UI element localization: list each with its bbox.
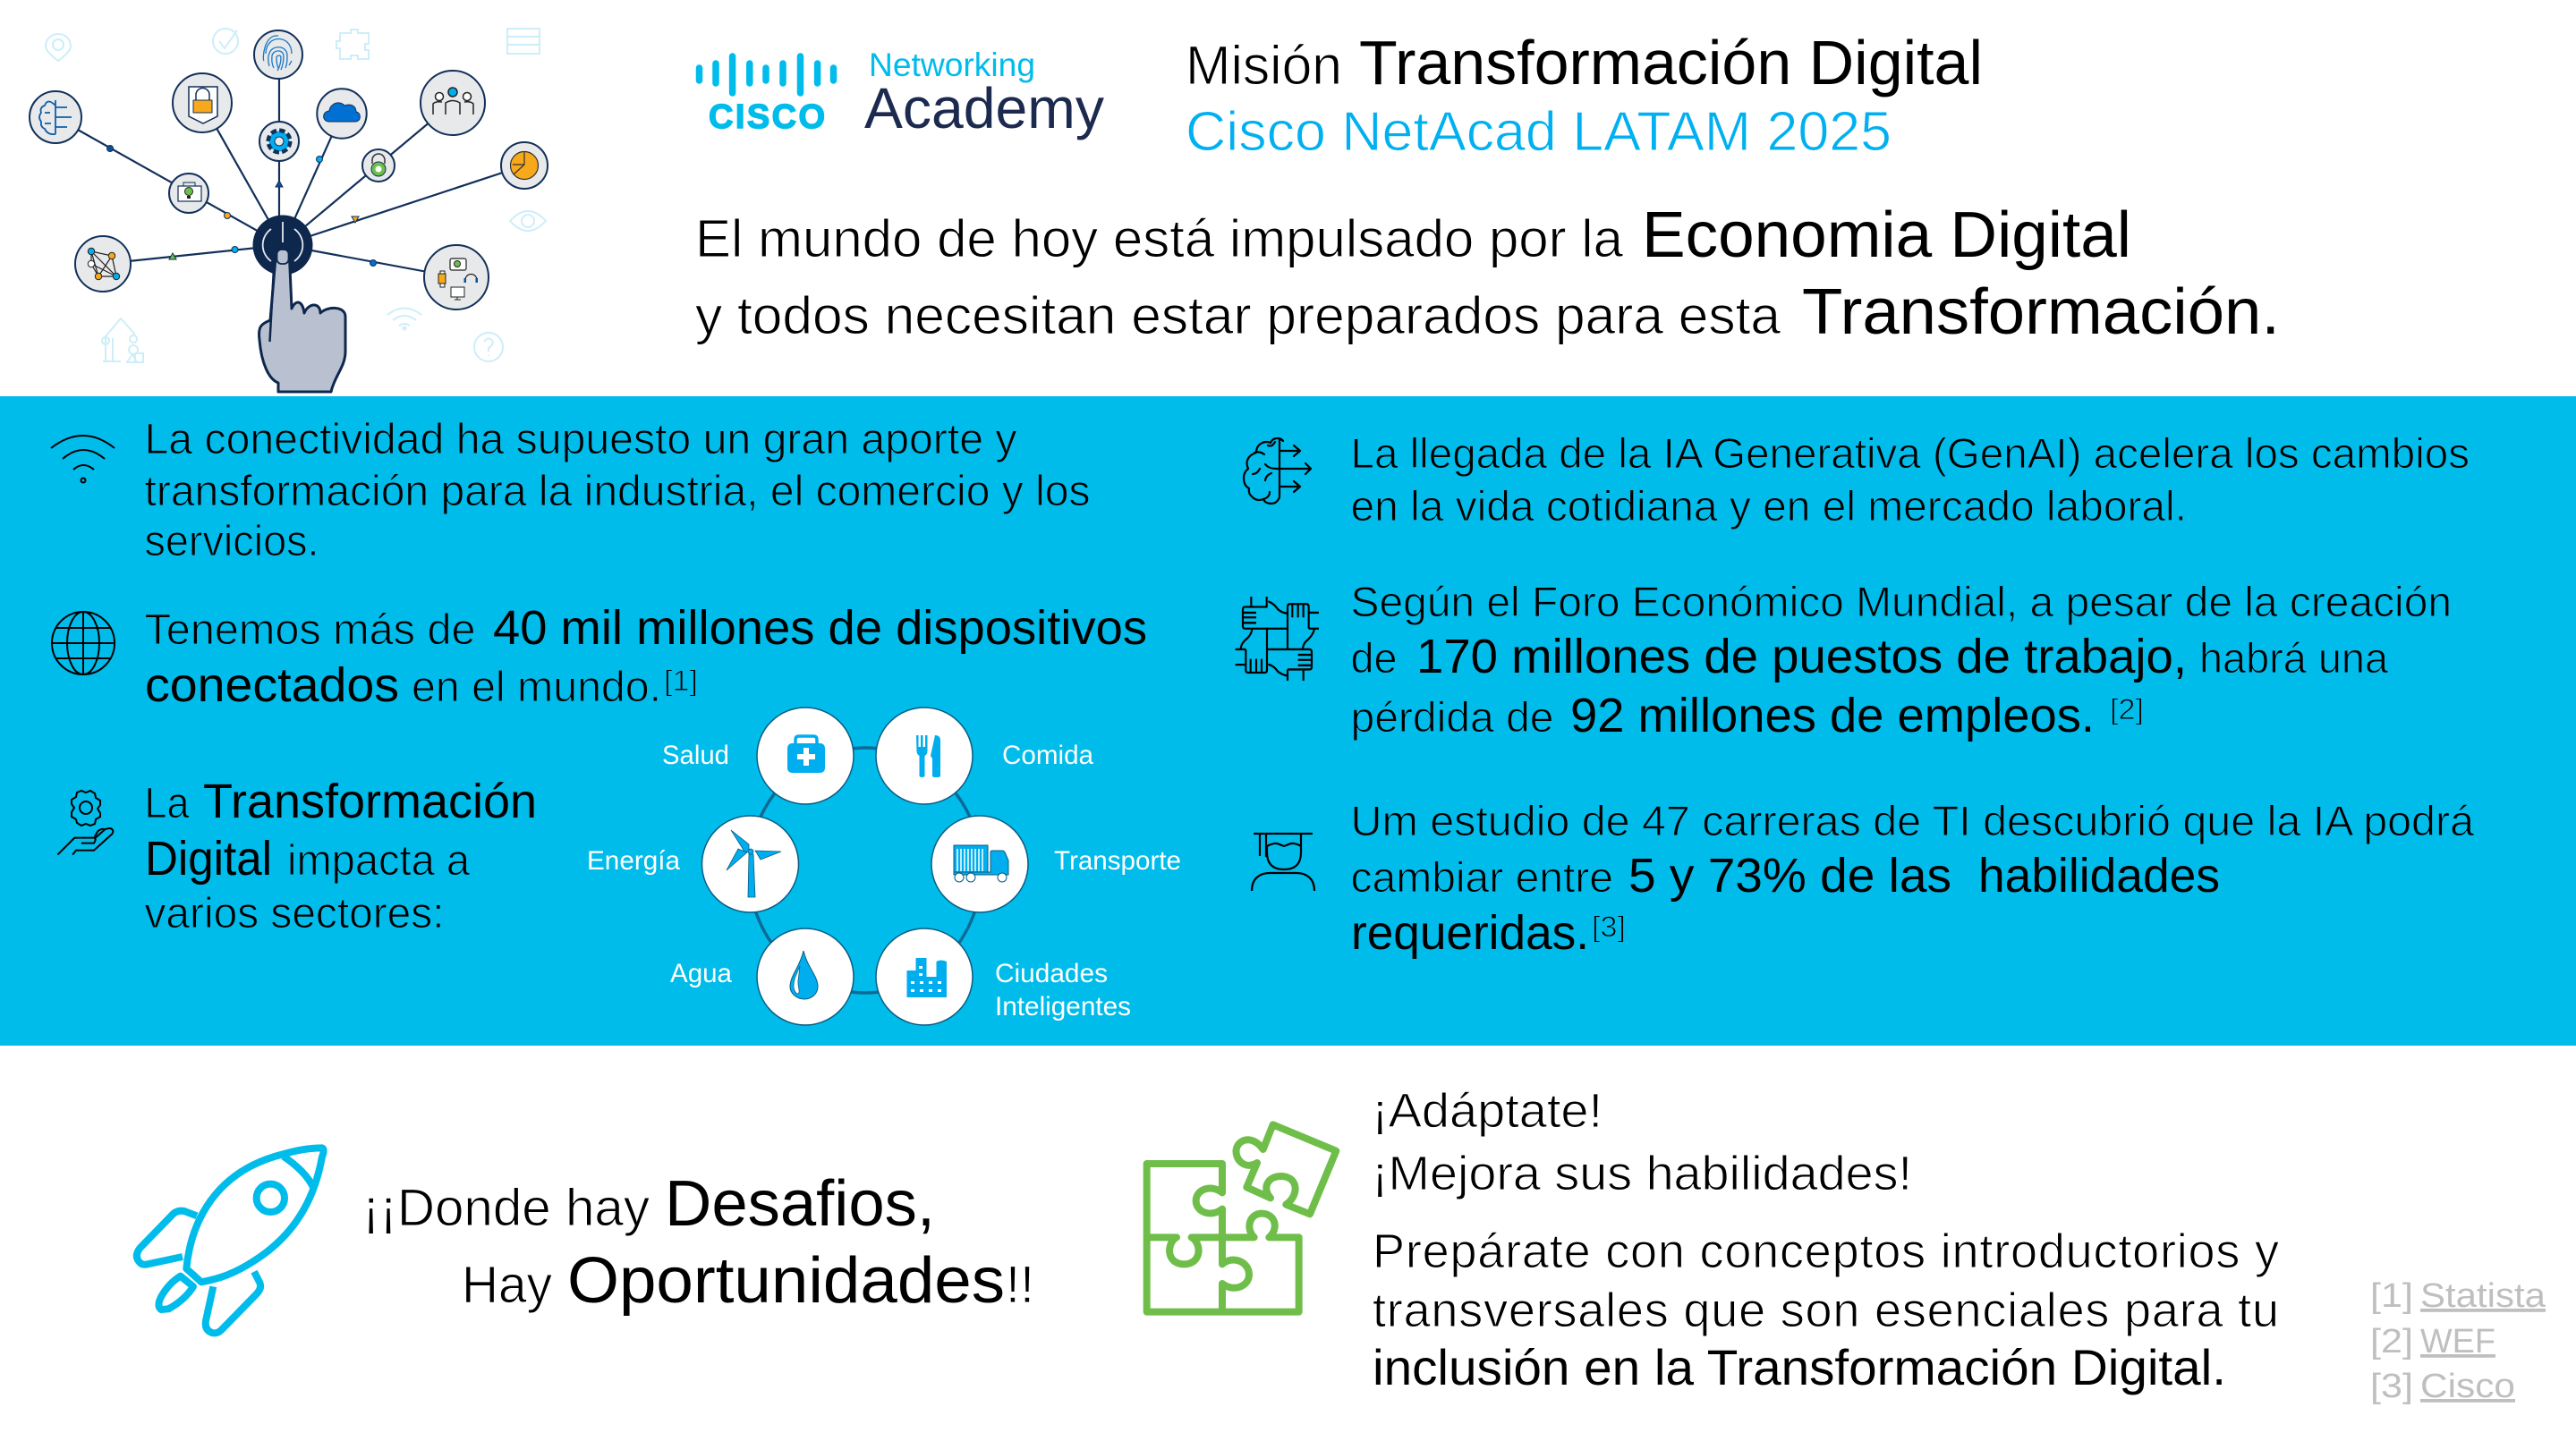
faded background icons	[46, 29, 546, 362]
text: adapt: inclusión en la Transformación Digital.	[1373, 1339, 2226, 1395]
text: devices: Tenemos más de	[145, 606, 476, 654]
connector markers	[107, 145, 376, 267]
chart: sectors wheel	[587, 708, 1181, 1025]
text: challenges: !!	[1006, 1256, 1034, 1314]
icon: truck	[954, 845, 1008, 882]
icon: devices	[438, 259, 478, 300]
text: adapt: Prepárate con conceptos introductorios y	[1373, 1225, 2279, 1278]
text: devices: 40 mil millones de dispositivos	[493, 601, 1147, 655]
text: IT careers study: requeridas.	[1351, 906, 1589, 960]
icon: gear	[268, 131, 290, 152]
icon: graduate	[1252, 834, 1314, 891]
wheel labels: Inteligentes	[995, 992, 1131, 1021]
icon: pie chart	[510, 152, 539, 179]
wheel labels: Energía	[587, 846, 680, 876]
icon: wind turbine	[727, 830, 781, 897]
icon: network	[88, 248, 120, 280]
icon: joined hands	[1236, 597, 1319, 681]
text: generative AI: La llegada de la IA Generativa (GenAI) acelera los cambios	[1351, 429, 2470, 477]
intro statement: y todos necesitan estar preparados para esta	[695, 286, 1781, 345]
icon: rocket	[137, 1148, 324, 1333]
wheel labels: Comida	[1002, 741, 1093, 770]
intro statement: Transformación.	[1802, 276, 2280, 348]
text: World Economic Forum: pérdida de	[1351, 693, 1553, 741]
text: connectivity: La conectividad ha supuesto un gran aporte y	[145, 416, 1016, 463]
icon: medkit	[787, 736, 825, 773]
icon: cloud	[324, 103, 360, 122]
text: World Economic Forum: 92 millones de empleos.	[1570, 689, 2095, 742]
text: sectors intro: La	[145, 780, 190, 827]
icon: globe	[52, 612, 115, 674]
wheel labels	[587, 741, 1181, 1021]
text: World Economic Forum: habrá una	[2199, 634, 2389, 682]
references: Cisco	[2420, 1368, 2515, 1405]
text: devices	[145, 601, 1147, 712]
panel: blue band	[0, 396, 2576, 1046]
references: Statista	[2420, 1277, 2546, 1315]
text: World Economic Forum	[1351, 578, 2452, 742]
text: devices: conectados	[145, 658, 399, 712]
text: connectivity: servicios.	[145, 518, 319, 565]
intro statement: Economia Digital	[1642, 199, 2131, 271]
icon: city	[907, 958, 947, 997]
title: Transformación Digital	[1359, 28, 1983, 97]
logo: Cisco Networking Academy	[700, 47, 1104, 140]
wheel labels: Agua	[670, 959, 732, 988]
icon: pointing hand	[259, 249, 345, 392]
text: sectors intro	[145, 775, 537, 937]
text: sectors intro: impacta a	[287, 837, 470, 885]
text: IT careers study: Um estudio de 47 carreras de TI descubrió que la IA podrá	[1351, 797, 2475, 844]
text: sectors intro: Digital	[145, 832, 272, 886]
panel: top illustration	[30, 29, 548, 392]
text: World Economic Forum: de	[1351, 634, 1398, 682]
cisco wordmark: CISCO	[709, 98, 825, 136]
subtitle: Cisco NetAcad LATAM 2025	[1186, 101, 1892, 163]
icon: people	[433, 88, 473, 114]
text: connectivity: transformación para la industria, el comercio y los	[145, 468, 1090, 515]
connector lines	[55, 55, 524, 277]
text: World Economic Forum: Según el Foro Económico Mundial, a pesar de la creación	[1351, 578, 2452, 625]
text: World Economic Forum: [2]	[2110, 693, 2144, 725]
icon: gear and hand	[58, 791, 113, 854]
wheel labels: Transporte	[1054, 846, 1181, 876]
text: World Economic Forum: 170 millones de puestos de trabajo,	[1416, 630, 2187, 683]
intro statement	[695, 199, 2280, 348]
text: challenges: ¡¡Donde hay	[362, 1179, 650, 1237]
text: connectivity	[145, 416, 1090, 565]
icon: cisco bars	[700, 56, 834, 93]
text: devices: [1]	[664, 665, 698, 697]
icon: wifi	[51, 436, 115, 483]
icon: puzzle	[1147, 1124, 1336, 1312]
text: sectors intro: varios sectores:	[145, 890, 444, 937]
text: challenges: Hay	[462, 1256, 552, 1314]
text: challenges	[362, 1168, 1034, 1317]
text: sectors intro: Transformación	[203, 775, 537, 828]
text: adapt: ¡Adáptate!	[1372, 1084, 1603, 1138]
references: WEF	[2420, 1323, 2495, 1360]
text: challenges: Oportunidades	[567, 1245, 1005, 1317]
text: adapt	[1372, 1084, 2279, 1395]
icon: shield lock	[189, 87, 217, 123]
text: devices: en el mundo.	[412, 664, 661, 711]
networking label: Networking	[869, 47, 1035, 83]
text: generative AI	[1351, 429, 2470, 530]
text: IT careers study: cambiar entre	[1351, 853, 1613, 901]
references	[2370, 1277, 2546, 1405]
wheel labels: Ciudades	[995, 959, 1108, 988]
references: [3]	[2370, 1368, 2413, 1405]
icon: brain	[39, 100, 72, 134]
academy label: Academy	[864, 76, 1104, 140]
text: adapt: ¡Mejora sus habilidades!	[1372, 1147, 1912, 1200]
circles	[30, 30, 548, 309]
hub power button	[252, 215, 313, 275]
text: adapt: transversales que son esenciales para tu	[1373, 1284, 2279, 1337]
icon: brain arrows	[1244, 438, 1311, 504]
text: generative AI: en la vida cotidiana y en el mercado laboral.	[1351, 482, 2187, 530]
text: IT careers study: habilidades	[1978, 849, 2220, 903]
intro statement: El mundo de hoy está impulsado por la	[695, 209, 1623, 268]
text: challenges: Desafios,	[665, 1168, 935, 1240]
wheel labels: Salud	[662, 741, 729, 770]
text: IT careers study: [3]	[1592, 911, 1626, 943]
icon: water drop	[790, 951, 818, 999]
text: IT careers study	[1351, 797, 2475, 960]
icon: fork and knife	[916, 735, 940, 777]
title: Misión	[1186, 35, 1342, 96]
text: IT careers study: 5 y 73% de las	[1628, 849, 1951, 903]
icon: small lock	[371, 154, 386, 176]
icon: idea briefcase	[178, 182, 201, 201]
icon: fingerprint	[263, 36, 292, 71]
references: [1]	[2370, 1277, 2413, 1315]
title	[1186, 28, 1983, 163]
references: [2]	[2370, 1323, 2413, 1360]
